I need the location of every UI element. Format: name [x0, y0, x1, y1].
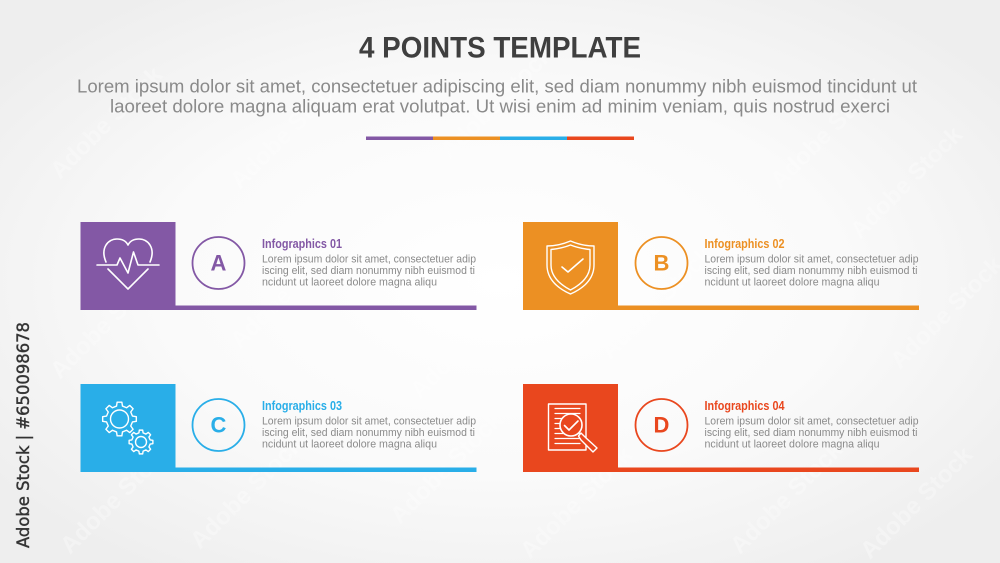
text block 04: Lorem ipsum dolor sit amet, consectetuer adip: [704, 416, 918, 428]
text block 02: Infographics 02: [704, 237, 785, 251]
badge B: [636, 237, 688, 289]
text block 01: ncidunt ut laoreet dolore magna aliqu: [262, 276, 437, 288]
text block 02: ncidunt ut laoreet dolore magna aliqu: [704, 276, 880, 288]
text block 01: iscing elit, sed diam nonummy nibh euismod ti: [262, 265, 475, 277]
text: Adobe Stock: [405, 281, 528, 404]
text: Adobe Stock: [595, 241, 718, 364]
text block 02: Lorem ipsum dolor sit amet, consectetuer adip: [704, 254, 918, 266]
text block 01: Lorem ipsum dolor sit amet, consectetuer adip: [262, 254, 476, 266]
intro text: laoreet dolore magna aliquam erat volutpat. Ut wisi enim ad minim veniam, quis nostrud exerci: [110, 96, 890, 116]
text: Adobe Stock: [185, 431, 308, 554]
text block 04: ncidunt ut laoreet dolore magna aliqu: [704, 438, 880, 450]
icon: document with magnifier: [548, 404, 597, 452]
text block 02: [704, 237, 918, 288]
badge C: C: [211, 412, 227, 438]
text block 02: iscing elit, sed diam nonummy nibh euismod ti: [704, 265, 918, 277]
text: Adobe Stock: [385, 406, 508, 529]
text: Adobe Stock: [225, 231, 348, 354]
panel: A Infographics 01: [80, 222, 476, 310]
intro text: [77, 76, 917, 116]
panel: C Infographics 03: [80, 384, 476, 472]
title: 4 POINTS TEMPLATE: [359, 32, 641, 64]
icon: shield with check: [547, 241, 594, 294]
text block 04: [704, 399, 918, 450]
text: Adobe Stock: [725, 436, 848, 559]
text: Adobe Stock: [855, 441, 978, 563]
icon: gears: [103, 402, 153, 454]
text block 03: Lorem ipsum dolor sit amet, consectetuer adip: [262, 416, 476, 428]
panel: B Infographics 02: [523, 222, 919, 310]
four colour divider: [366, 136, 634, 140]
text: Adobe Stock: [45, 261, 168, 384]
text: Adobe Stock: [845, 121, 968, 244]
icon: heart with pulse: [97, 239, 159, 289]
badge B: B: [654, 250, 669, 276]
text block 03: [262, 399, 476, 450]
text block 03: ncidunt ut laoreet dolore magna aliqu: [262, 438, 437, 450]
text block 04: Infographics 04: [704, 399, 785, 413]
stock id side label: Adobe Stock | #650098678: [14, 322, 34, 548]
badge D: [636, 399, 688, 451]
text block 01: Infographics 01: [262, 237, 342, 251]
text block 03: Infographics 03: [262, 399, 342, 413]
badge A: [192, 237, 244, 289]
text block 04: iscing elit, sed diam nonummy nibh euismod ti: [704, 427, 918, 439]
text: Adobe Stock: [225, 71, 348, 194]
text: Adobe Stock: [765, 71, 888, 194]
badge C: [192, 399, 244, 451]
text block 03: iscing elit, sed diam nonummy nibh euismod ti: [262, 427, 475, 439]
panel: D Infographics 04: [523, 384, 919, 472]
text block 01: [262, 237, 476, 288]
text: Adobe Stock: [435, 41, 558, 164]
badge A: A: [211, 250, 227, 276]
text: Adobe Stock: [515, 441, 638, 563]
badge D: D: [654, 412, 669, 438]
text: Adobe Stock: [45, 61, 168, 184]
intro text: Lorem ipsum dolor sit amet, consectetuer adipiscing elit, sed diam nonummy nibh euismod tincidunt ut: [77, 76, 917, 96]
text: Adobe Stock: [55, 436, 178, 559]
